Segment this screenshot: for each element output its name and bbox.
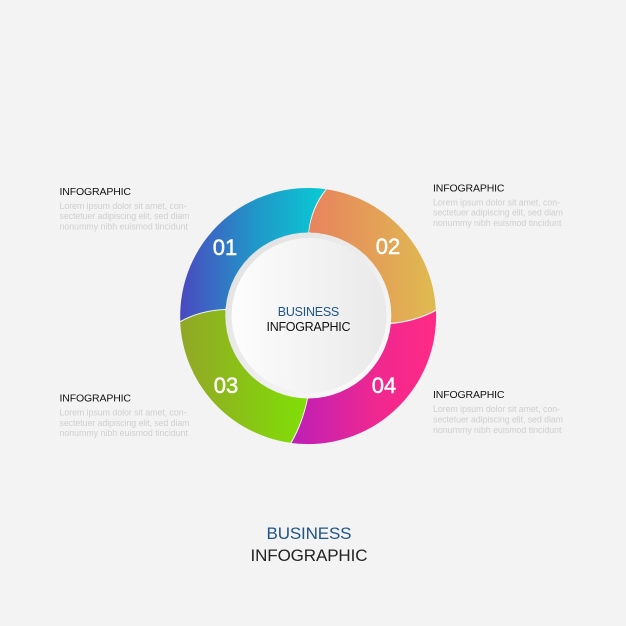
centre ring <box>225 232 391 398</box>
text block: top left: INFOGRAPHIC <box>60 186 131 198</box>
number 03: 03 <box>214 373 238 398</box>
centre label: BUSINESS <box>278 305 339 319</box>
text block: bottom left: sectetuer adipiscing elit, sed diam <box>60 418 190 428</box>
text block: top right: INFOGRAPHIC <box>433 182 505 194</box>
text block: top left <box>60 186 190 232</box>
number 01: 01 <box>213 235 237 260</box>
text block: bottom right: Lorem ipsum dolor sit amet, con- <box>433 404 560 414</box>
number 04: 04 <box>372 373 396 398</box>
text block: top right: sectetuer adipiscing elit, sed diam <box>433 208 563 218</box>
text block: top left: sectetuer adipiscing elit, sed diam <box>60 211 190 221</box>
text block: bottom right: sectetuer adipiscing elit, sed diam <box>433 414 563 424</box>
bottom title: INFOGRAPHIC <box>250 546 368 565</box>
segment 01 <box>180 188 326 321</box>
text block: bottom left: nonummy nibh euismod tincidunt <box>60 428 189 438</box>
text block: bottom left: Lorem ipsum dolor sit amet, con- <box>60 408 187 418</box>
segment 03 <box>180 310 307 443</box>
bottom title: BUSINESS <box>266 524 352 543</box>
text block: top left: Lorem ipsum dolor sit amet, con- <box>60 201 187 211</box>
bottom title <box>250 524 368 565</box>
segment 02 <box>309 189 436 323</box>
text block: top right: Lorem ipsum dolor sit amet, con- <box>433 198 560 208</box>
text block: bottom left: INFOGRAPHIC <box>60 392 131 404</box>
centre label <box>266 305 350 334</box>
text block: top left: nonummy nibh euismod tincidunt <box>60 222 189 232</box>
text block: bottom left <box>60 392 190 438</box>
text block: bottom right: nonummy nibh euismod tincidunt <box>433 425 562 435</box>
centre disc <box>232 238 386 393</box>
donut chart <box>180 188 436 444</box>
text block: bottom right: INFOGRAPHIC <box>433 389 505 401</box>
text block: top right: nonummy nibh euismod tincidunt <box>433 218 562 228</box>
text block: bottom right <box>433 389 563 435</box>
number 02: 02 <box>376 234 400 259</box>
segment 04 <box>292 311 436 444</box>
text block: top right <box>433 182 563 228</box>
centre label: INFOGRAPHIC <box>266 320 350 334</box>
